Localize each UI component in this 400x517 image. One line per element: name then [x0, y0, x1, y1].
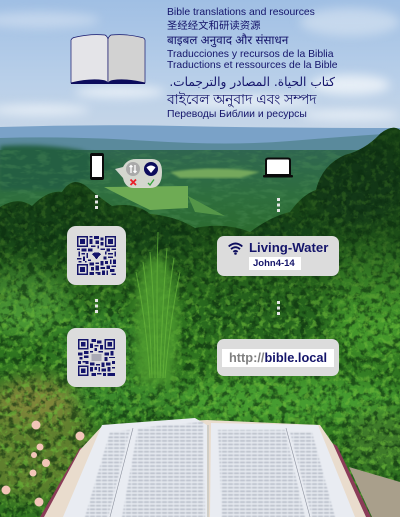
speech bubble: connection status — [115, 159, 162, 188]
icon: open book — [70, 34, 146, 84]
dotted connector: laptop to wifi — [277, 198, 280, 212]
Russian line: Переводы Библии и ресурсы — [167, 109, 307, 120]
dotted connector: wifi to url — [277, 301, 280, 315]
icon: phone — [90, 153, 104, 180]
open bible photo — [40, 418, 371, 517]
QR card: wifi — [67, 226, 126, 285]
Hindi line: बाइबल अनुवाद और संसाधन — [167, 33, 288, 47]
card: Wi-Fi network name — [217, 236, 339, 276]
Arabic line: كتاب الحياة. المصادر والترجمات. — [169, 75, 335, 89]
Spanish line: Traducciones y recursos de la Biblia — [167, 49, 334, 60]
QR card: url — [67, 328, 126, 387]
grass — [135, 232, 180, 385]
icon: wifi — [228, 242, 243, 255]
foreground foliage — [0, 120, 400, 517]
stone wall — [349, 467, 400, 517]
dotted connector: phone to QR — [95, 195, 98, 209]
network name: Living-Water — [249, 240, 328, 255]
card: local URL — [217, 339, 339, 376]
url text: http://bible.local — [229, 350, 327, 365]
flowers — [2, 420, 84, 506]
Bengali line: বাইবেল অনুবাদ এবং সম্পদ — [167, 92, 316, 107]
dotted connector: QR to QR — [95, 299, 98, 313]
password field — [249, 257, 301, 270]
text: Bible translations in several languages — [166, 7, 338, 120]
English line: Bible translations and resources — [167, 7, 315, 18]
password field: John4-14 — [253, 258, 295, 269]
icon: laptop — [263, 158, 293, 178]
field — [104, 186, 188, 210]
French line: Traductions et ressources de la Bible — [167, 60, 338, 71]
Chinese line: 圣经经文和研读资源 — [167, 21, 261, 32]
